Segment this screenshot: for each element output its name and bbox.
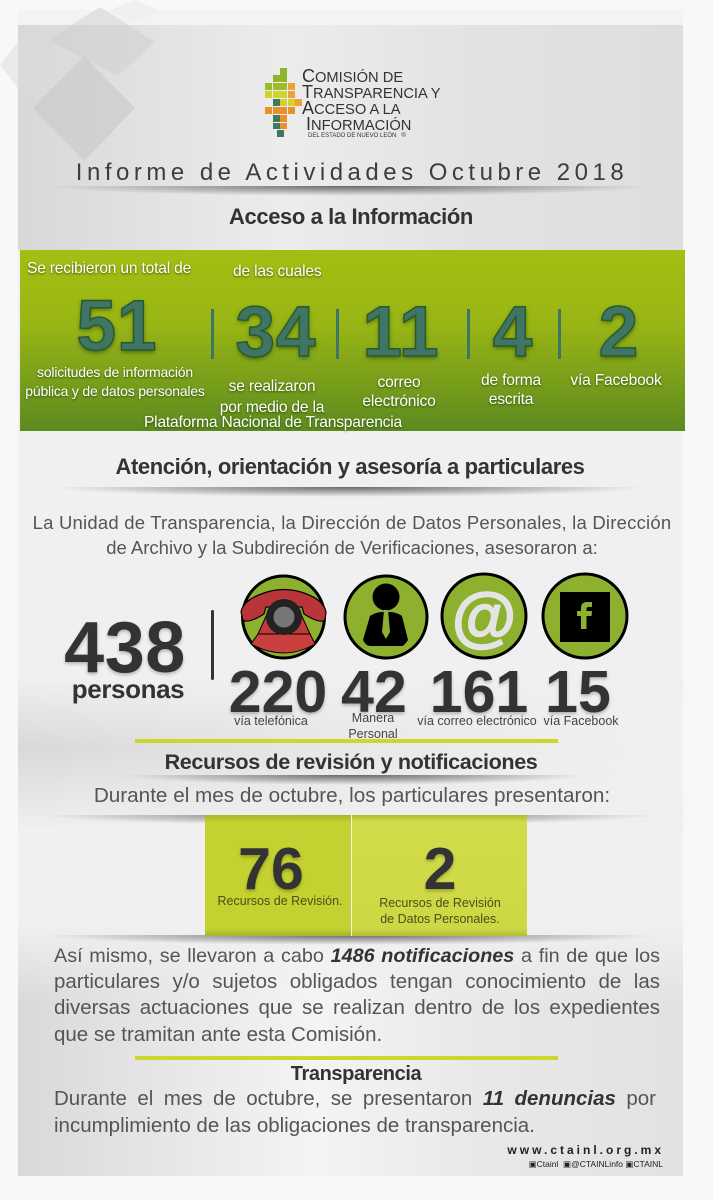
- caption 4: [480, 372, 542, 408]
- caption 34: por medio de la: [220, 399, 324, 416]
- caption 11: electrónico: [362, 393, 436, 410]
- label personas: personas: [72, 674, 184, 704]
- heading: acceso: Acceso a la Información: [229, 204, 473, 229]
- caption 34: [220, 378, 325, 417]
- intro text: de Archivo y la Subdireción de Verificaciones, asesoraron a:: [106, 537, 598, 558]
- intro recursos: Durante el mes de octubre, los particulares presentaron:: [94, 784, 610, 807]
- card right: [352, 815, 527, 936]
- label personal: [348, 711, 398, 741]
- caption right: [379, 896, 501, 926]
- paragraph notificaciones: diversas actuaciones que se realizan dentro de los expedientes: [54, 996, 660, 1019]
- card left: [205, 815, 351, 936]
- dividers: [211, 309, 561, 359]
- text: total: Se recibieron un total de: [27, 260, 191, 277]
- paragraph denuncias: incumplimiento de las obligaciones de transparencia.: [54, 1114, 535, 1137]
- caption 11: [362, 374, 436, 410]
- paragraph notificaciones: que se tramitan ante esta Comisión.: [54, 1023, 382, 1046]
- social handles: ▣Ctainl ▣@CTAINLinfo ▣CTAINL: [529, 1159, 663, 1169]
- label correo: vía correo electrónico: [417, 714, 537, 728]
- caption 4: escrita: [489, 391, 533, 408]
- panel: acceso a la informacion: [20, 250, 685, 431]
- icon: at sign: @: [452, 579, 516, 653]
- divider line: [135, 1056, 558, 1060]
- stat 220: 220: [229, 659, 327, 725]
- number 76: 76: [238, 836, 304, 902]
- caption 51: pública y de datos personales: [25, 383, 205, 399]
- stat 42: 42: [341, 659, 407, 725]
- paragraph denuncias: [54, 1087, 656, 1137]
- label facebook: vía Facebook: [543, 714, 619, 728]
- caption right: Recursos de Revisión: [379, 896, 501, 910]
- number 4: 4: [493, 293, 533, 372]
- intro text: La Unidad de Transparencia, la Dirección de Datos Personales, la Dirección: [33, 512, 671, 533]
- caption 2: vía Facebook: [570, 372, 662, 389]
- title: Informe de Actividades Octubre 2018: [76, 159, 628, 186]
- caption plataforma: Plataforma Nacional de Transparencia: [144, 414, 402, 431]
- stat 15: 15: [545, 659, 611, 725]
- logo mark: [265, 68, 302, 137]
- vertical divider: [211, 610, 214, 680]
- logo text: ACCESO A LA: [302, 98, 401, 118]
- caption 51: solicitudes de información: [37, 364, 193, 380]
- caption left: Recursos de Revisión.: [217, 894, 343, 908]
- paragraph notificaciones: particulares y/o sujetos obligados tengan conocimiento de las: [54, 970, 660, 993]
- paragraph notificaciones: [54, 945, 660, 1046]
- icon: facebook: [542, 572, 628, 660]
- caption 34: se realizaron: [229, 378, 315, 395]
- label personal: Manera: [352, 711, 394, 725]
- icon: at sign: [440, 572, 528, 660]
- caption right: de Datos Personales.: [380, 912, 500, 926]
- number 34: 34: [236, 293, 316, 372]
- logo text: INFORMACIÓN: [306, 114, 411, 134]
- label telefonica: vía telefónica: [234, 714, 308, 728]
- panel: recursos: [205, 815, 527, 936]
- heading: atencion: Atención, orientación y asesoría a particulares: [115, 454, 585, 479]
- paragraph notificaciones: Así mismo, se llevaron a cabo 1486 notificaciones a fin de que los: [54, 945, 660, 967]
- paragraph denuncias: Durante el mes de octubre, se presentaron 11 denuncias por: [54, 1087, 656, 1110]
- stat 161: 161: [430, 659, 528, 725]
- logo text: DEL ESTADO DE NUEVO LEÓN ®: [308, 133, 406, 139]
- label personal: Personal: [348, 727, 398, 741]
- logo text: COMISIÓN DE: [302, 66, 403, 86]
- text: de las cuales: de las cuales: [233, 263, 321, 280]
- logo: [265, 66, 441, 139]
- caption 4: de forma: [481, 372, 541, 389]
- total 438: 438: [64, 608, 186, 688]
- icon: telephone: [240, 574, 327, 660]
- caption 11: correo: [377, 374, 420, 391]
- number 51: 51: [77, 287, 157, 366]
- logo text: [302, 66, 441, 139]
- heading: recursos: Recursos de revisión y notificaciones: [165, 749, 537, 774]
- icon: person: [344, 574, 428, 660]
- number 2: 2: [424, 836, 456, 902]
- heading: transparencia: Transparencia: [291, 1063, 421, 1085]
- intro text: [33, 512, 671, 558]
- logo text: TRANSPARENCIA Y: [302, 82, 441, 102]
- number 2: 2: [599, 293, 639, 372]
- number 11: 11: [362, 293, 440, 372]
- divider line: [135, 739, 558, 743]
- website: www.ctainl.org.mx: [507, 1143, 664, 1157]
- caption 51: [25, 364, 206, 401]
